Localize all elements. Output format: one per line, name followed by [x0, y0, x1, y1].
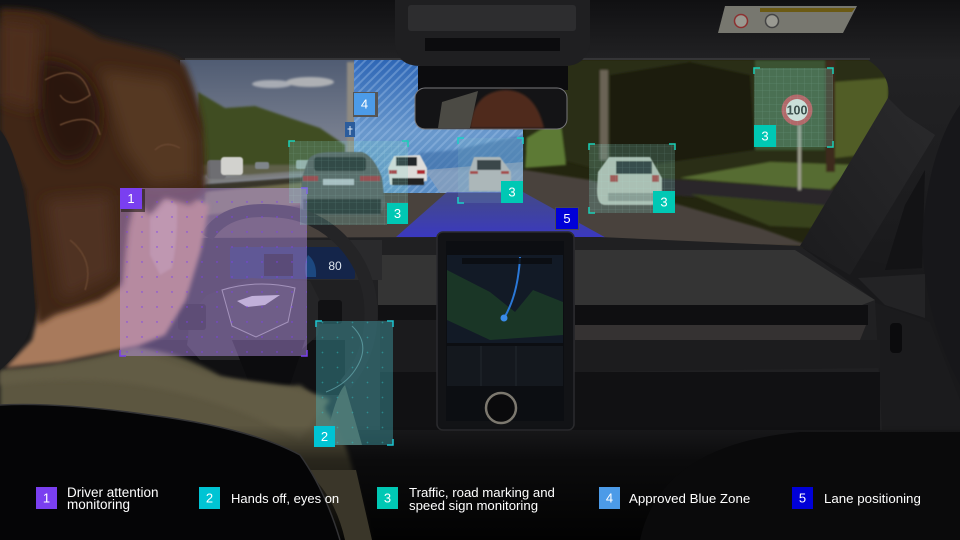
dashboard: [140, 237, 882, 430]
legend item 1: Driver attention: [67, 485, 159, 500]
legend item 2: [199, 487, 339, 509]
legend item 3: speed sign monitoring: [409, 498, 538, 513]
badge 1: [120, 188, 142, 209]
driver hair: [0, 8, 206, 325]
background cars on left carriageway: [207, 157, 310, 179]
instrument cluster: [230, 247, 355, 279]
driver neck and skin: [5, 188, 209, 368]
traffic monitoring box: speed sign: [754, 68, 833, 147]
badge 3: 3: [660, 194, 668, 210]
badge 4: 4: [361, 96, 368, 112]
badge 1: 1: [127, 191, 135, 206]
driver seat headrest: [0, 130, 35, 370]
driver ear: [150, 198, 177, 275]
legend item 2: 2: [206, 490, 213, 506]
legend: [36, 485, 921, 513]
instrument cluster: 80: [328, 259, 342, 273]
headliner and windshield frame: [0, 0, 960, 280]
legend item 4: Approved Blue Zone: [629, 491, 750, 506]
badge 3: 3: [761, 128, 769, 144]
hands off zone: [314, 321, 393, 447]
legend item 4: 4: [606, 490, 613, 506]
icon: speed limit sign 100: 100: [787, 104, 807, 118]
lane positioning overlay: [396, 192, 610, 240]
overhead console: [395, 0, 590, 90]
centre touchscreen: [437, 232, 574, 430]
rearview mirror: [415, 88, 567, 129]
legend item 1: [36, 485, 159, 512]
icon: speed limit sign 100: [782, 94, 812, 126]
road scene through windshield: [180, 58, 900, 248]
badge 5: 5: [563, 211, 571, 226]
badge 4: [353, 92, 378, 117]
badge 5: [555, 207, 579, 230]
legend item 3: 3: [384, 490, 391, 506]
legend item 5: [792, 487, 921, 509]
right A-pillar and door: [800, 98, 960, 430]
traffic monitoring box: right car: [589, 144, 675, 213]
bottom fade and front seats: [0, 404, 960, 540]
legend item 5: Lane positioning: [824, 491, 921, 506]
legend item 2: Hands off, eyes on: [231, 491, 339, 506]
legend item 3: Traffic, road marking and: [409, 485, 555, 500]
legend item 5: 5: [799, 490, 806, 506]
icon: blue road sign: [345, 122, 355, 137]
badge 3: 3: [508, 184, 516, 200]
legend item 1: 1: [43, 490, 50, 506]
lead cars: [301, 152, 662, 215]
legend item 3: [377, 485, 555, 513]
driver attention zone: [120, 188, 307, 356]
blue zone overlay: [354, 60, 523, 193]
steering wheel: [178, 210, 371, 385]
badge 2: 2: [321, 429, 328, 444]
legend item 1: monitoring: [67, 497, 130, 512]
badge 3: 3: [394, 206, 401, 221]
driver shirt: [0, 347, 372, 540]
traffic monitoring box: left car: [289, 141, 408, 225]
legend item 4: [599, 487, 750, 509]
traffic monitoring box: centre car: [458, 138, 523, 203]
